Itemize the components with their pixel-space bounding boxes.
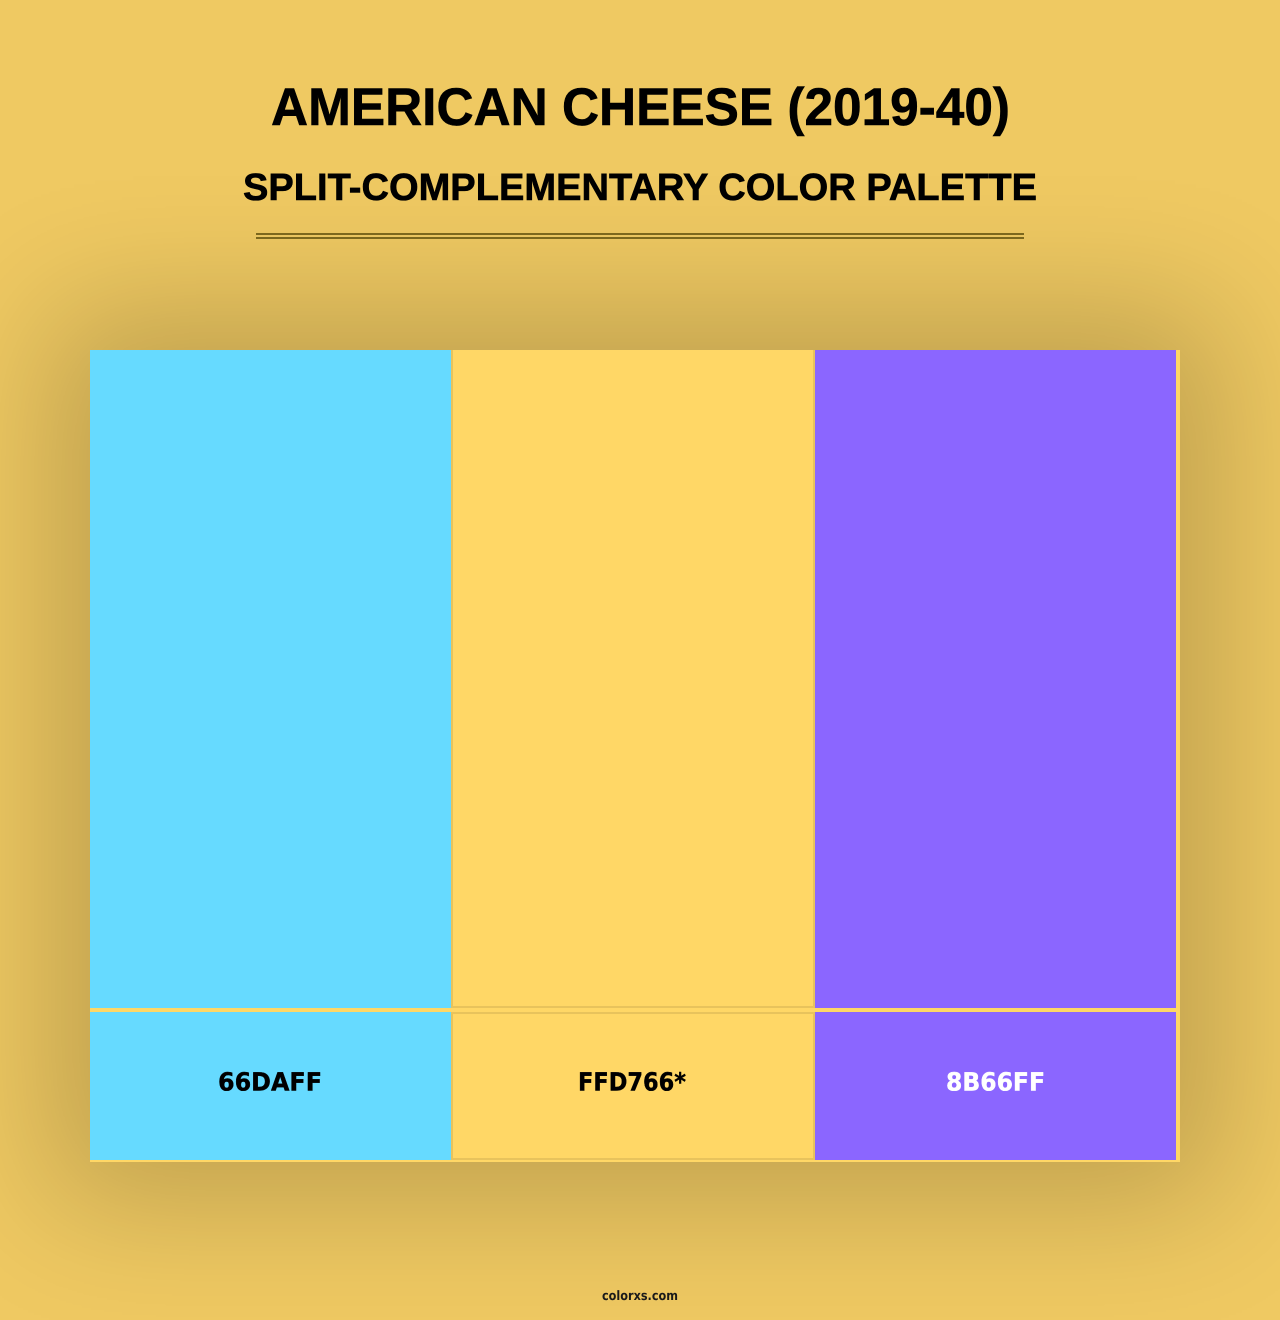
title: AMERICAN CHEESE (2019-40) <box>271 78 1010 137</box>
panel: color palette <box>90 350 1180 1162</box>
swatch: yellow <box>451 350 815 1008</box>
swatch: violet <box>815 350 1176 1008</box>
label swatch: violet 8B66FF <box>815 1012 1176 1160</box>
code: FFD766*: FFD766* <box>578 1068 686 1096</box>
swatch: sky blue <box>90 350 451 1008</box>
subtitle: SPLIT-COMPLEMENTARY COLOR PALETTE <box>243 167 1037 209</box>
code: 8B66FF: 8B66FF <box>946 1068 1045 1096</box>
label swatch: sky blue 66DAFF <box>90 1012 451 1160</box>
double divider <box>256 233 1024 239</box>
heading block <box>243 78 1037 239</box>
code: 66DAFF: 66DAFF <box>218 1068 322 1096</box>
footer: site credit: colorxs.com <box>602 1289 678 1304</box>
label swatch: yellow FFD766 <box>451 1012 815 1160</box>
